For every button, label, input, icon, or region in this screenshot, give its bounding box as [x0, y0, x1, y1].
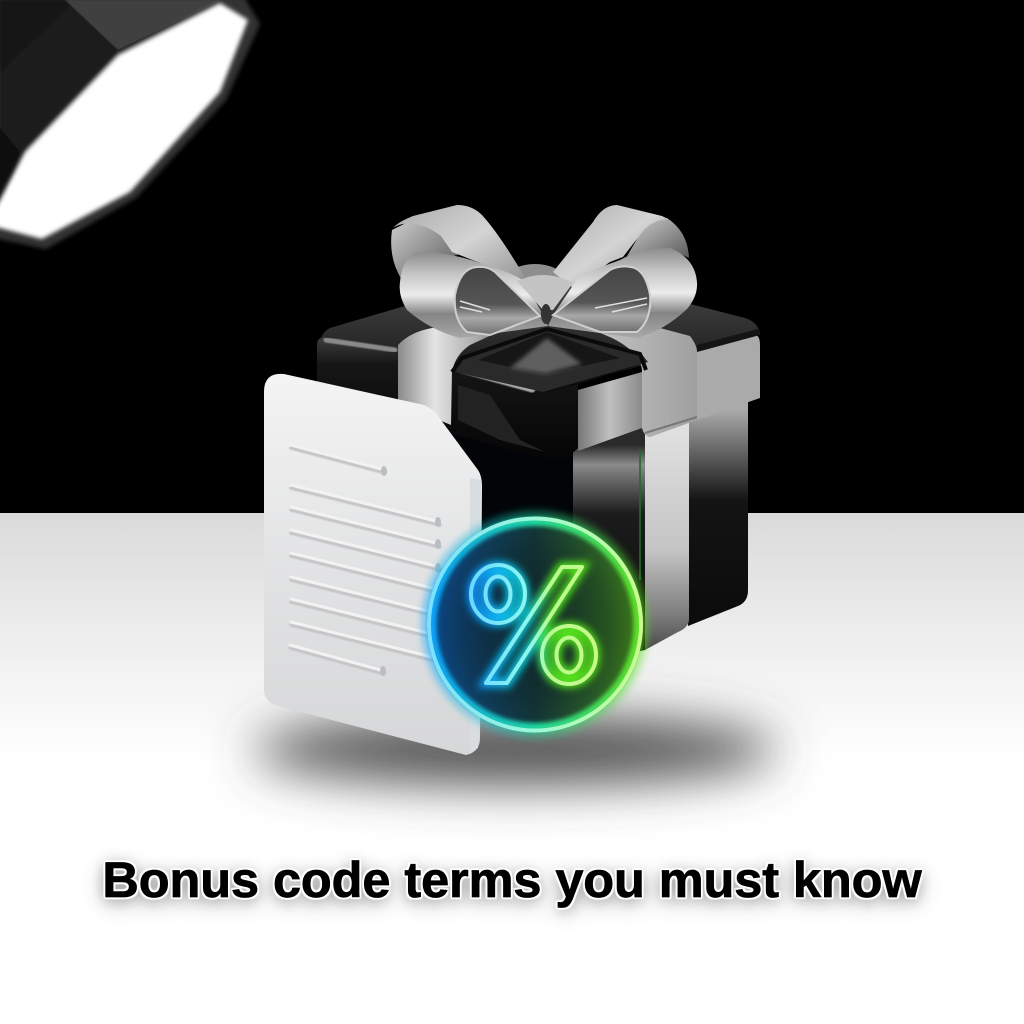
- floor shadow: [253, 716, 777, 784]
- gift box: [317, 272, 760, 660]
- ribbon on lid, right: [575, 322, 697, 437]
- black studio backdrop: [0, 0, 1024, 513]
- lid right panels: [578, 372, 642, 451]
- vertical ribbon: [645, 418, 689, 650]
- ribbon on lid, left: [398, 322, 520, 425]
- badge disc: [427, 516, 643, 732]
- knot backing: [507, 264, 563, 292]
- bow: [391, 205, 697, 338]
- front left loop: [400, 252, 548, 338]
- badge glow: [425, 514, 645, 734]
- white floor: [0, 513, 1024, 1024]
- line end caps: [380, 466, 441, 676]
- badge ring: [429, 518, 641, 730]
- terms document: [264, 374, 482, 755]
- percent sign: [471, 565, 596, 684]
- percent sign glow: [472, 566, 595, 683]
- front right loop: [548, 248, 697, 338]
- text lines: [290, 445, 440, 674]
- neon percent badge: [425, 514, 645, 734]
- front top panel of lid: [455, 328, 648, 392]
- box body: [400, 400, 748, 660]
- back left loop: [391, 205, 524, 290]
- back right loop: [553, 205, 689, 288]
- softbox studio light: [0, 0, 260, 249]
- knot: [517, 275, 573, 310]
- title: Bonus code terms you must know: [102, 851, 922, 908]
- lid top face: [320, 272, 760, 392]
- lid left face: [317, 337, 578, 458]
